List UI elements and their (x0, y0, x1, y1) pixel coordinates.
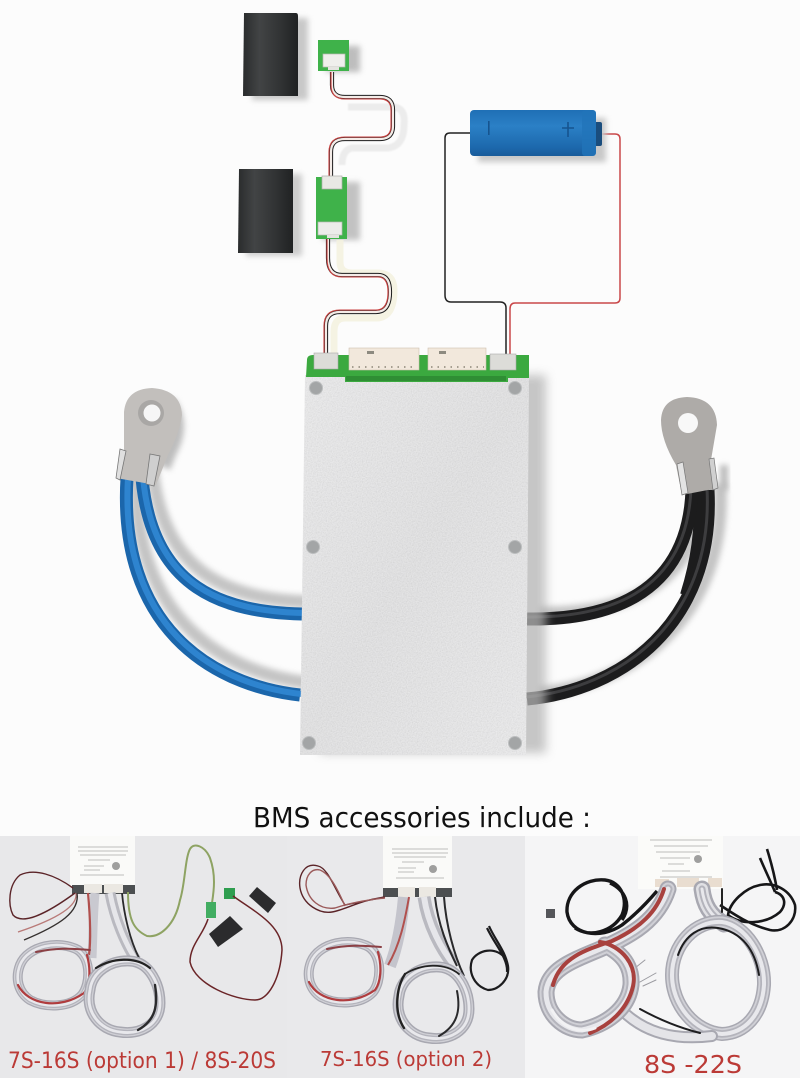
label: 7S-16S (option 2) (320, 1047, 492, 1071)
green/yellow sensor wire (128, 846, 214, 936)
shrink tube upper (249, 887, 276, 913)
small connector right (490, 354, 516, 370)
battery wires (445, 133, 628, 356)
balance leads (88, 893, 139, 960)
cable lug: left (116, 388, 184, 486)
shrink tube: lower (238, 169, 302, 256)
aluminium plate (300, 375, 529, 755)
coil right (397, 966, 469, 1039)
temperature sensor (471, 926, 508, 990)
balance leads: right (424, 897, 464, 976)
connectors (72, 884, 135, 894)
battery (470, 110, 606, 162)
balance connector A (349, 348, 419, 370)
bottom tail (627, 960, 712, 1037)
sensor board: top (318, 40, 360, 72)
balance leads: left coil (546, 889, 668, 1033)
screws (546, 909, 555, 918)
sensor board small (206, 902, 216, 918)
panel: 8S-22S (525, 836, 800, 1078)
red-black sensor wire (190, 896, 282, 1000)
sensor wire: upper (329, 72, 404, 178)
sensor wire: lower (324, 239, 394, 355)
label: 7S-16S (option 1) / 8S-20S (8, 1049, 276, 1074)
board (383, 836, 452, 888)
power wire loop (10, 872, 77, 940)
balance leads: left (388, 897, 409, 966)
board (638, 836, 723, 889)
shrink tube lower (209, 916, 243, 947)
sensor board: middle (316, 176, 360, 240)
sensor wires (720, 849, 795, 930)
power wire loop (300, 865, 385, 912)
shrink tube: top (243, 13, 308, 100)
coil left (309, 942, 381, 1002)
coil right (672, 922, 764, 1034)
cable shadows (136, 466, 720, 693)
coil left (18, 945, 90, 1005)
cables: blue positive (126, 477, 303, 695)
screws (302, 382, 522, 750)
small connector left (314, 353, 338, 369)
black wire coil (567, 880, 657, 934)
cables: black negative (526, 488, 708, 699)
coil right (89, 960, 160, 1033)
sensor board square (224, 888, 235, 899)
balance leads: right (702, 889, 724, 924)
title: BMS accessories include : (253, 801, 591, 834)
board (70, 836, 135, 886)
panel: option 2 (287, 836, 525, 1078)
cable lug: right (661, 397, 728, 495)
background: product photo (0, 0, 800, 800)
green PCB (306, 355, 529, 382)
BMS board (300, 348, 546, 755)
connectors (383, 887, 452, 897)
panel: option 1 (0, 836, 287, 1078)
balance connector B (428, 348, 486, 370)
